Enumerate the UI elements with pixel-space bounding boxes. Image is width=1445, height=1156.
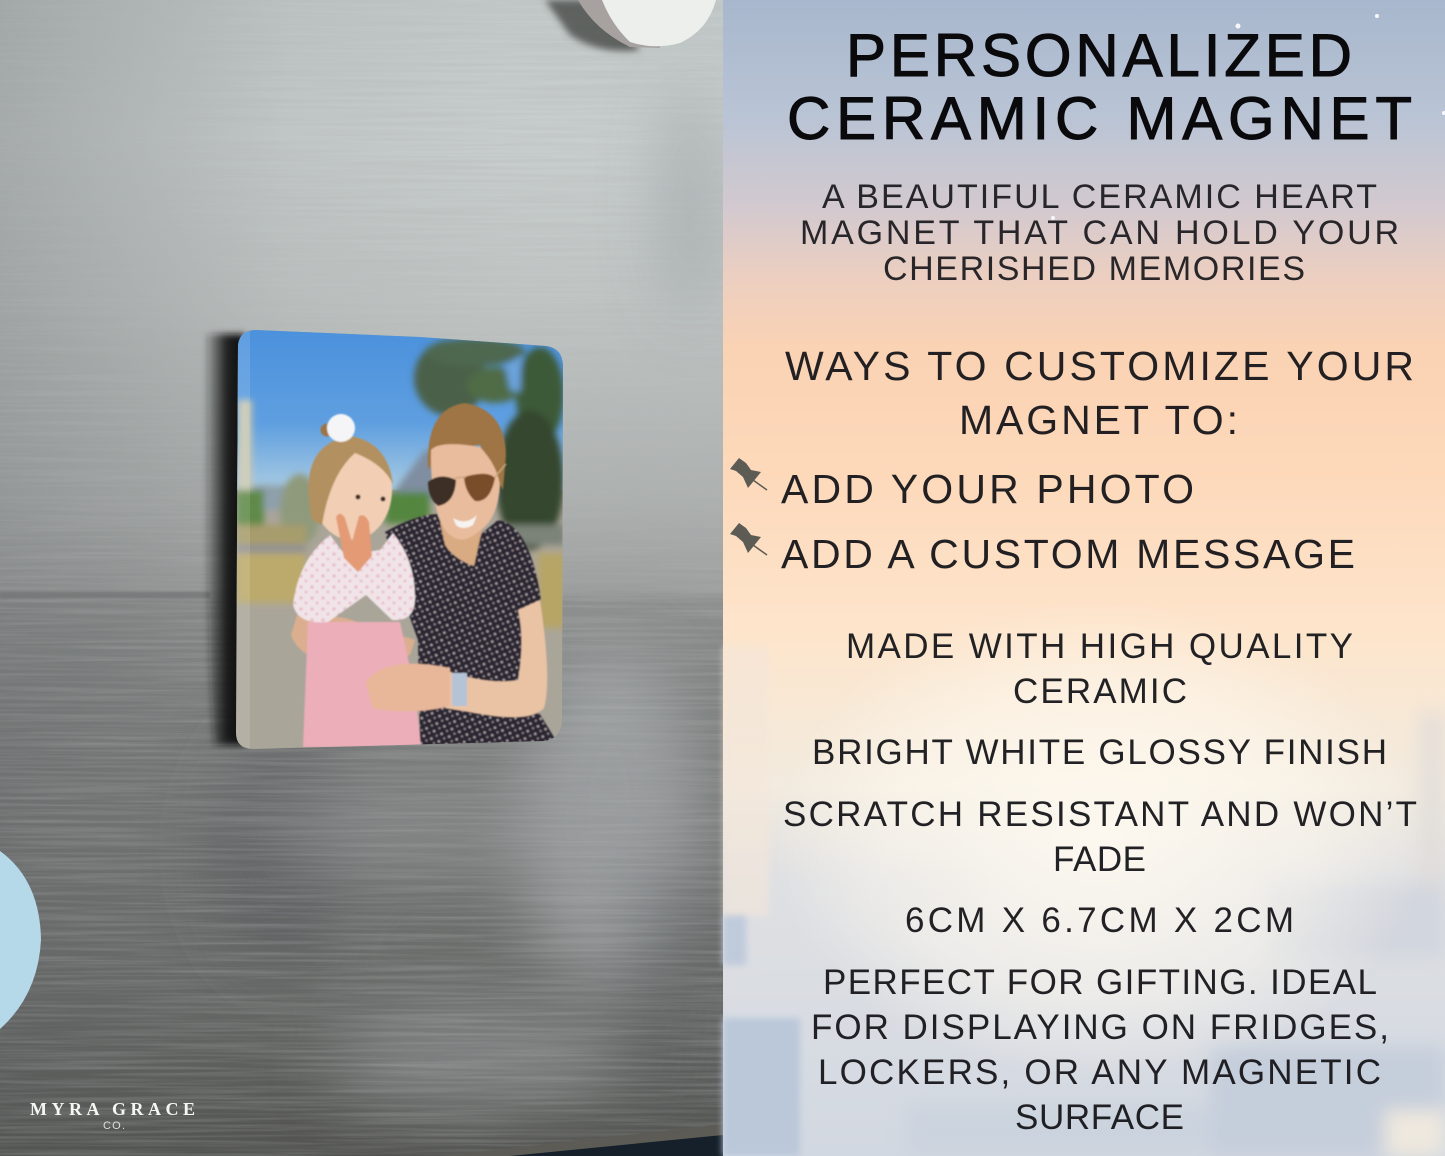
feature: durability: [783, 795, 1417, 879]
icon: pushpin: [730, 523, 767, 555]
feature: gifting: PERFECT FOR GIFTING. IDEAL: [823, 963, 1377, 1002]
brand logo: [30, 1099, 195, 1132]
customization option: photo: ADD YOUR PHOTO: [781, 466, 1194, 512]
magnet shadow: [205, 334, 245, 745]
child sweater: [293, 533, 415, 622]
woman hair: [428, 403, 506, 490]
customization heading: MAGNET TO:: [959, 397, 1238, 443]
child hands: [336, 514, 372, 572]
brand logo: MYRA GRACE: [30, 1099, 195, 1119]
subtitle: MAGNET THAT CAN HOLD YOUR: [800, 214, 1399, 252]
customization option: message: ADD A CUSTOM MESSAGE: [781, 531, 1355, 577]
customization heading: [785, 343, 1414, 443]
woman face: [431, 444, 500, 540]
icon: white round magnet at top: [545, 0, 716, 51]
feature: gifting: [811, 963, 1389, 1137]
customization heading: WAYS TO CUSTOMIZE YOUR: [785, 343, 1414, 389]
title: CERAMIC MAGNET: [787, 85, 1412, 152]
feature: gifting: SURFACE: [1015, 1098, 1184, 1137]
title: [787, 22, 1412, 152]
subtitle: A BEAUTIFUL CERAMIC HEART: [822, 178, 1377, 216]
woman dress: [385, 514, 557, 747]
brand logo: CO.: [103, 1120, 125, 1132]
feature: ceramic: [846, 627, 1353, 711]
woman hand: [366, 664, 450, 712]
ceramic photo magnet: [230, 325, 570, 755]
feature: gifting: LOCKERS, OR ANY MAGNETIC: [818, 1053, 1381, 1092]
feature: gifting: FOR DISPLAYING ON FRIDGES,: [811, 1008, 1389, 1047]
subtitle: [800, 178, 1399, 288]
glossy edge highlight: [236, 330, 250, 750]
panel: brushed steel fridge photo: [0, 0, 730, 1156]
feature: dimensions: 6CM X 6.7CM X 2CM: [905, 901, 1294, 940]
child head: [322, 452, 393, 540]
title: PERSONALIZED: [846, 22, 1352, 89]
feature: finish: BRIGHT WHITE GLOSSY FINISH: [812, 733, 1387, 772]
woman arms: [445, 600, 547, 717]
panel: watercolor product details: [723, 0, 1445, 1156]
icon: blue round magnet at left: [0, 851, 41, 1029]
watercolor city backdrop: [723, 600, 1445, 1156]
feature: durability: FADE: [1053, 840, 1146, 879]
bottom fridge edge: [442, 1124, 723, 1156]
photo background: [236, 338, 566, 628]
sky sparkles: [1016, 14, 1445, 220]
child dress: [303, 622, 421, 747]
feature: ceramic: CERAMIC: [1013, 672, 1187, 711]
icon: pushpin: [730, 458, 767, 490]
woman sunglasses: [428, 476, 456, 506]
subtitle: CHERISHED MEMORIES: [883, 250, 1305, 288]
woman neck: [440, 522, 482, 566]
feature: durability: SCRATCH RESISTANT AND WON’T: [783, 795, 1417, 834]
feature: ceramic: MADE WITH HIGH QUALITY: [846, 627, 1353, 666]
